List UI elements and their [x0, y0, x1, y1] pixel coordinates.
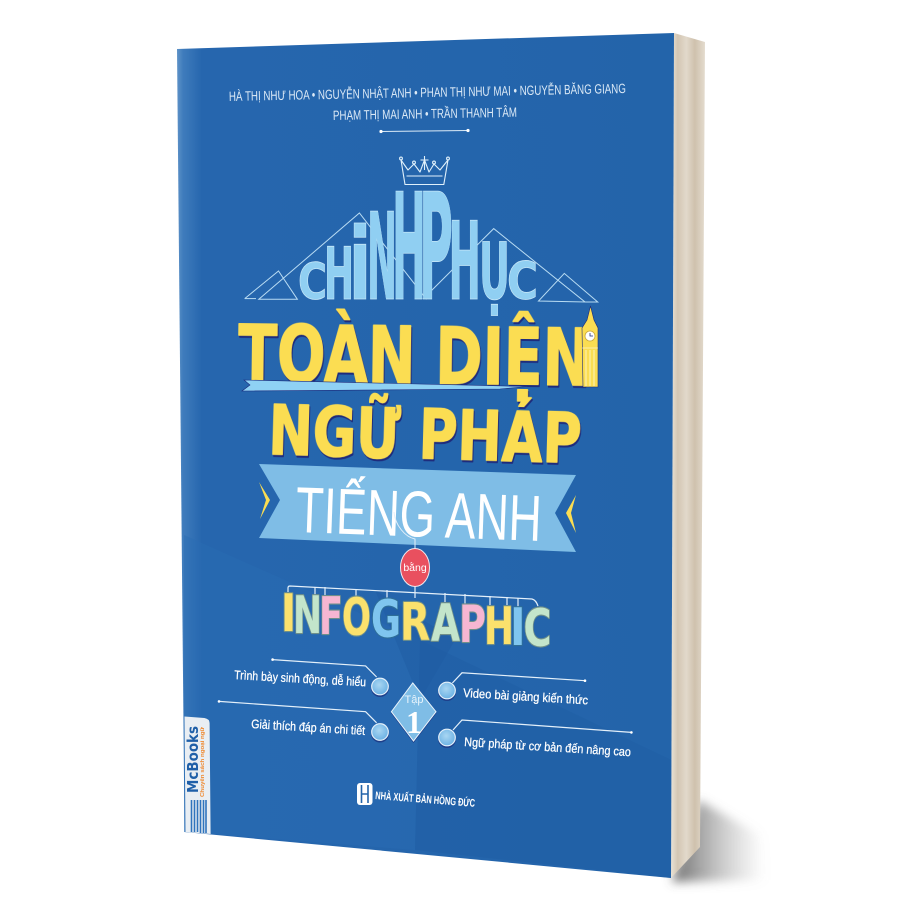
heading: INFOGRAPHIC: R — [400, 593, 430, 653]
feature: Ngữ pháp từ cơ bản: Ngữ pháp từ cơ bản đến nâng cao — [464, 735, 631, 759]
chevron right — [566, 495, 576, 533]
heading: TIẾNG ANH: TIẾNG ANH — [294, 473, 543, 555]
heading: INFOGRAPHIC: O — [342, 588, 371, 648]
heading: INFOGRAPHIC — [281, 584, 552, 659]
heading: INFOGRAPHIC: F — [319, 587, 343, 647]
heading: CHINH PHỤC: C — [298, 253, 327, 311]
publisher — [357, 783, 476, 810]
panel: book cover — [177, 33, 674, 878]
heading: CHINH PHỤC: H — [324, 232, 354, 316]
heading: INFOGRAPHIC: A — [431, 594, 460, 654]
badge: bằng — [400, 548, 430, 586]
ground shadow — [672, 800, 765, 882]
connector to bằng — [394, 512, 415, 549]
heading: CHINH PHỤC: H — [448, 200, 481, 325]
heading: INFOGRAPHIC: G — [371, 590, 401, 650]
logo: McBooks — [184, 716, 211, 834]
icon: Big Ben tower — [582, 306, 598, 387]
heading: INFOGRAPHIC: C — [524, 599, 552, 659]
heading: CHINH PHỤC: P — [419, 162, 453, 334]
book page block — [671, 33, 705, 878]
heading: CHINH PHỤC: N — [367, 189, 397, 328]
authors line 2: PHẠM THỊ MAI ANH • TRẦN THANH TÂM — [333, 105, 517, 123]
feature: Giải thích đáp án — [218, 700, 389, 742]
feature: Video bài giảng: Video bài giảng kiến thức — [463, 686, 588, 707]
icon: crown — [400, 156, 449, 184]
ribbon under TOÀN DIỆN — [242, 380, 528, 391]
badge: Tập 1: Tập — [405, 694, 423, 706]
heading: INFOGRAPHIC: I — [510, 598, 526, 658]
heading: CHINH PHỤC: i — [348, 206, 372, 323]
publisher: NHÀ XUẤT BẢN HỒNG ĐỨC — [375, 789, 476, 810]
heading: CHINH PHỤC: H — [392, 162, 426, 334]
banner — [259, 464, 576, 552]
heading: CHINH PHỤC: C — [507, 252, 538, 312]
heading: INFOGRAPHIC: I — [281, 584, 296, 644]
badge: Tập 1 — [391, 683, 436, 743]
heading: INFOGRAPHIC: H — [484, 597, 514, 657]
divider with dots — [379, 129, 470, 133]
logo: McBooks: Chuyên sách ngoại ngữ — [200, 727, 206, 797]
heading: CHINH PHỤC: Ụ — [479, 228, 510, 318]
tree connector — [288, 586, 538, 607]
chevron left — [259, 482, 270, 519]
feature: Giải thích đáp án: Giải thích đáp án chi tiết — [251, 717, 366, 738]
heading: TOÀN DIỆN: TOÀN DIỆN — [238, 307, 591, 404]
feature: Trình bày sinh động: Trình bày sinh động, dễ hiểu — [234, 667, 366, 689]
heading: CHINH PHỤC — [298, 162, 538, 334]
logo: McBooks: McBooks — [184, 726, 202, 793]
badge: bằng: bằng — [403, 561, 427, 574]
heading: NGỮ PHÁP: NGỮ PHÁP — [268, 389, 583, 480]
feature: Trình bày sinh động — [234, 658, 389, 697]
feature: Video bài giảng — [438, 673, 588, 707]
triangles behind heading — [245, 213, 598, 302]
heading: INFOGRAPHIC: N — [293, 586, 322, 646]
feature: Ngữ pháp từ cơ bản — [438, 720, 633, 759]
heading: INFOGRAPHIC: P — [459, 595, 486, 655]
authors line 1: HÀ THỊ NHƯ HOA • NGUYỄN NHẬT ANH • PHAN THỊ NHƯ MAI • NGUYỄN BĂNG GIANG — [229, 81, 626, 104]
badge: Tập 1: 1 — [406, 704, 422, 740]
